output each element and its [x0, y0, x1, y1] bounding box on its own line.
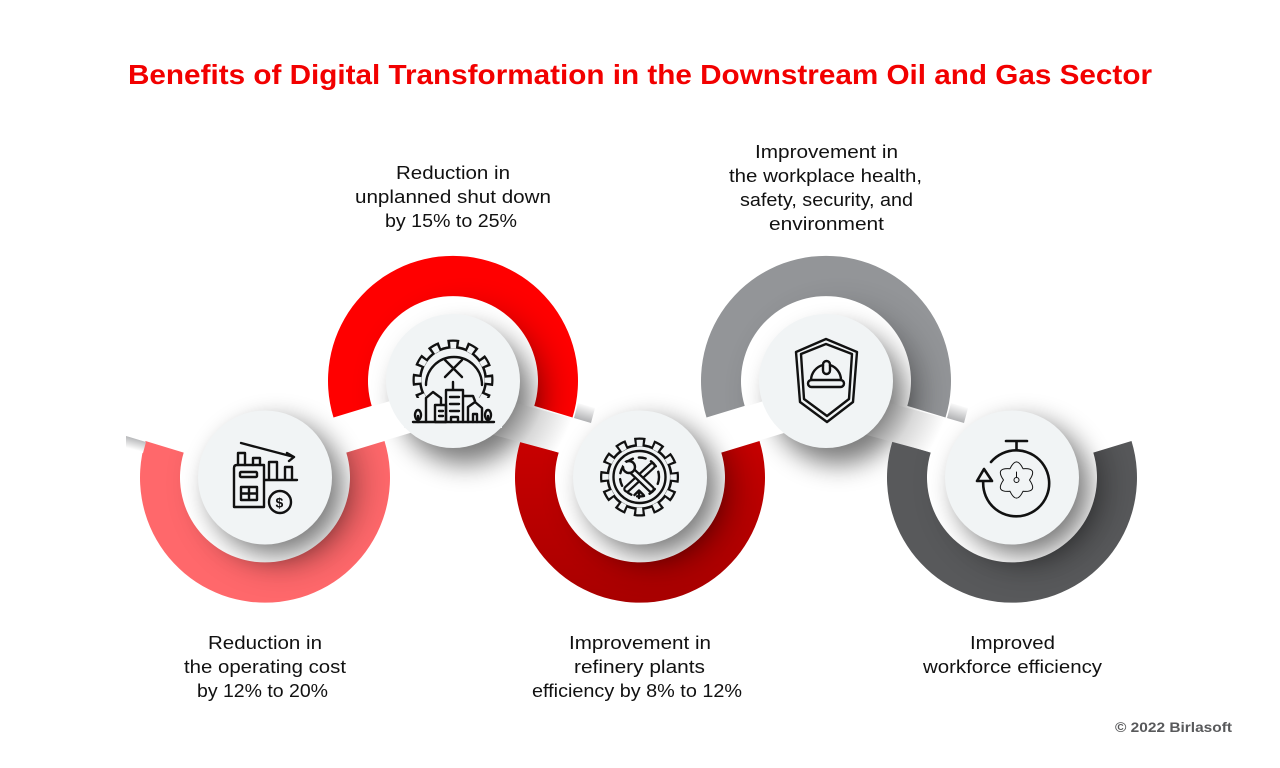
- step 1 ring: light red arc: [140, 441, 390, 603]
- text: workplace HSE: [729, 142, 922, 234]
- circle 3: [573, 410, 707, 544]
- step 2 ring: red arch: [328, 256, 578, 418]
- text: workplace HSE: Improvement in: [755, 142, 898, 162]
- circle 4: [759, 314, 893, 448]
- circle 2: [386, 314, 520, 448]
- text: operating cost: the operating cost: [184, 657, 346, 677]
- text: workplace HSE: environment: [769, 214, 884, 234]
- text: operating cost: [184, 633, 346, 701]
- text: refinery plants: refinery plants: [574, 657, 705, 677]
- text: unplanned shut down: Reduction in: [396, 163, 510, 183]
- connector bands: [126, 392, 968, 466]
- icon: calculator, falling chart and dollar: [234, 443, 297, 513]
- text: workplace HSE: the workplace health,: [729, 166, 922, 186]
- text: unplanned shut down: by 15% to 25%: [385, 211, 517, 231]
- text: refinery plants: Improvement in: [569, 633, 711, 653]
- icon: stopwatch with cycle arrow: [977, 441, 1049, 516]
- title: Benefits of Digital Transformation in the Downstream Oil and Gas Sector: [128, 59, 1152, 90]
- text: refinery plants: [532, 633, 742, 701]
- icon: gear with wrench and screwdriver: [604, 442, 674, 512]
- copyright footer: © 2022 Birlasoft: [1115, 720, 1233, 735]
- shadow of upper circles: [398, 330, 905, 464]
- text: workforce efficiency: [922, 633, 1102, 677]
- text: unplanned shut down: [355, 163, 551, 231]
- icon: gear with city: [404, 344, 502, 428]
- step 5 ring: dark grey arc: [887, 441, 1137, 603]
- step 4 ring: grey arch: [701, 256, 951, 418]
- icon: calculator, falling chart and dollar: $: [276, 494, 284, 510]
- circle 1: [198, 410, 332, 544]
- text: refinery plants: efficiency by 8% to 12%: [532, 681, 742, 701]
- shadow of lower circles: [209, 421, 1090, 555]
- circle 5: [945, 410, 1079, 544]
- text: operating cost: by 12% to 20%: [197, 681, 328, 701]
- text: workforce efficiency: workforce efficiency: [922, 657, 1102, 677]
- text: workforce efficiency: Improved: [970, 633, 1055, 653]
- text: unplanned shut down: unplanned shut down: [355, 187, 551, 207]
- icon: shield with hard hat: [796, 339, 857, 422]
- step 3 ring: dark red arc: [515, 441, 765, 603]
- text: workplace HSE: safety, security, and: [740, 190, 913, 210]
- text: operating cost: Reduction in: [208, 633, 322, 653]
